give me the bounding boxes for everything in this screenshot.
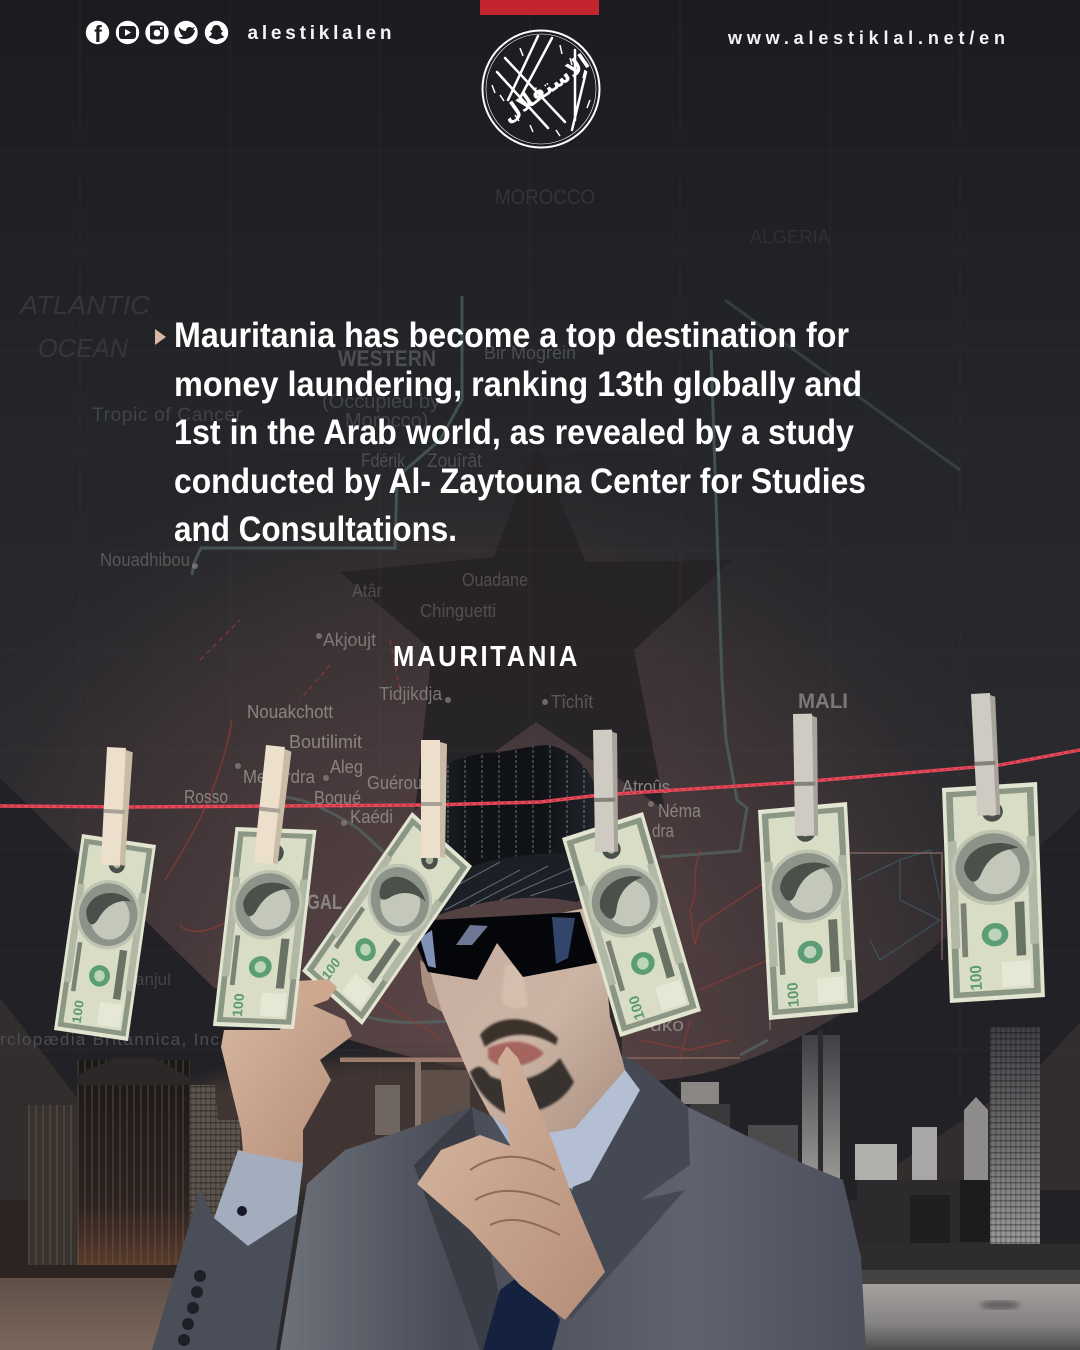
icon: snapchat [205,21,228,44]
map labels: MALI [798,690,848,713]
skyline: right buildings [681,1027,1080,1284]
map labels: Chinguetti [420,601,496,621]
man: shirt collar [545,1058,640,1190]
map labels: Tidjikdja [379,684,443,704]
peg 3 [421,740,447,858]
map labels: Guérou [367,773,422,793]
headline text block: Mauritania has become a top destination for [174,316,849,355]
map labels: Nouakchott [247,702,333,722]
map labels: Boqué [314,788,361,808]
icon: facebook: f [94,21,102,47]
map labels: Ouadane [462,570,528,590]
map labels: Tropic of Cancer [92,405,243,426]
peg 2 [254,745,292,865]
water: right harbour [850,1284,1080,1350]
map labels: dra [652,821,675,841]
map labels: (Occupied by [322,391,440,413]
man: raised hand [221,979,352,1163]
man: ear [420,960,442,1012]
social icons [86,21,228,47]
map: blue river network [858,850,940,960]
map labels: Atroûs [622,777,670,797]
map labels: rclopædia Britannica, Inc. [0,1030,225,1049]
map labels: Mederdra [243,767,316,787]
clothes pegs [101,693,1001,866]
map labels: Kaédi [350,807,393,827]
background: brown map glow with crescent opening [0,300,1080,1083]
map labels: MOROCCO [495,186,595,209]
map labels [0,186,848,1049]
man: sunglasses [413,912,597,980]
map labels: Rosso [184,787,228,807]
map labels: Akjoujt [323,630,376,650]
man: shirt front [486,1052,616,1240]
bill 4 [562,812,701,1037]
peg 1 [101,747,133,866]
logo: calligraphic seal [482,30,600,148]
skyline: left buildings [0,1058,470,1279]
headline text block: 1st in the Arab world, as revealed by a study [174,413,854,452]
map labels: Boutilimit [289,732,362,752]
logo: calligraphic seal: الاستقلال [497,49,594,127]
man: left sleeve [152,1189,297,1350]
headline text block: and Consultations. [174,510,457,549]
bill 1 [54,834,156,1041]
icon: youtube [116,21,139,44]
map labels: Néma [658,801,702,821]
man: right lapel [560,1052,690,1320]
map city dots [192,563,654,826]
man: finger over bill [300,979,337,1008]
map labels: Zouîrât [427,451,483,472]
headline text block [174,316,866,549]
map labels: Atâr [352,581,382,601]
background: star of the flag [340,443,732,810]
man: left lapel [414,1107,510,1350]
country label: MAURITANIA [393,641,580,673]
website url: www.alestiklal.net/en [727,28,1005,48]
headline text block: conducted by Al- Zaytouna Center for Studies [174,462,866,501]
bullet arrow [155,329,166,345]
map labels: GAL [307,891,342,914]
man: hair side [600,985,622,1062]
man: sleeve buttons [178,1270,206,1346]
social handle: alestiklalen [248,23,392,44]
background: lower ground tone [0,998,1080,1290]
money: bills on the line [54,782,1045,1041]
icon: twitter [174,21,198,44]
man: hat [432,745,600,917]
map labels: Aleg [330,757,363,777]
map: frame lines [340,853,942,1058]
map labels: OCEAN [38,333,128,363]
headline text block: money laundering, ranking 13th globally and [174,365,862,404]
map labels: anjul [135,970,171,989]
peg 4 [593,730,619,852]
water: left harbour [0,1278,240,1350]
map labels: Bir Mogrein [484,343,576,363]
map labels: Morocco) [345,410,428,432]
map labels: uko [650,1015,684,1035]
bill 3 [302,812,472,1025]
man: tie [483,1268,560,1350]
background: lower centre brown glow [140,1060,660,1200]
man: shushing hand [417,1046,605,1320]
bill 2 [213,827,316,1029]
map labels: ATLANTIC [18,290,150,320]
map labels: ALGERIA [750,227,830,247]
man: beard and moustache [470,965,574,1114]
peg 6 [971,693,1001,816]
icon: facebook [86,21,109,47]
man: cuff [214,1150,303,1246]
peg 5 [793,714,819,836]
map labels: Fdérik [361,451,405,472]
man: neck and face [425,905,625,1138]
map: country borders [192,296,960,1055]
map labels: Nouadhibou [100,550,190,570]
background: lower crescent band [0,778,1080,1200]
map labels: Tîchît [551,692,593,712]
map: red roads [165,620,768,1060]
bill 6 [942,782,1045,1003]
man: suit body [152,1052,866,1350]
red top tab [480,0,599,15]
rope [0,750,1080,807]
bill 5 [758,802,858,1020]
icon: instagram [145,21,169,44]
map labels: WESTERN [338,346,436,371]
